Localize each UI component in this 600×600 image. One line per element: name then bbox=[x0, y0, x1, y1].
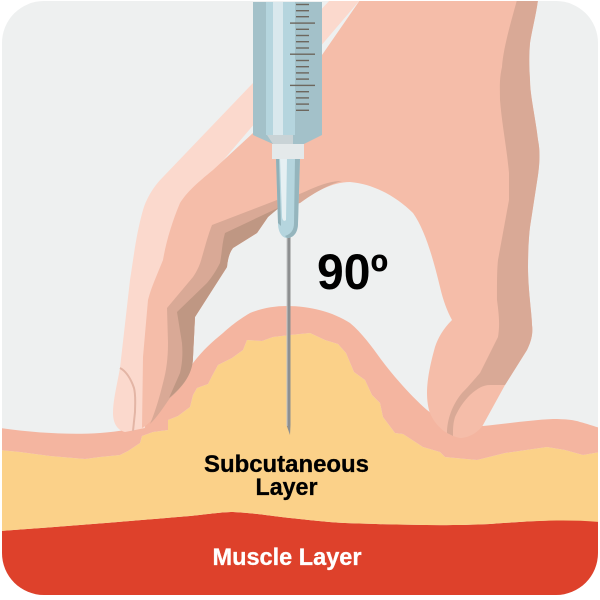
barrel highlight bbox=[273, 2, 283, 135]
hand: deep shadow under palm bbox=[169, 207, 280, 398]
label: 90 degree angle: 90º bbox=[317, 244, 388, 300]
syringe hub bbox=[276, 158, 300, 238]
barrel lighter band bbox=[266, 2, 295, 135]
hand: pinching the skin bbox=[113, 0, 540, 438]
syringe collar bbox=[272, 144, 304, 159]
needle bbox=[286, 236, 290, 435]
hand: thumb shadow bbox=[447, 0, 540, 436]
syringe barrel bbox=[253, 2, 322, 135]
label: subcutaneous layer: Subcutaneous bbox=[204, 451, 369, 478]
panel: subcutaneous fat layer bbox=[0, 333, 600, 531]
syringe bbox=[253, 2, 322, 435]
hub highlight bbox=[280, 158, 287, 221]
label: subcutaneous layer: Layer bbox=[256, 474, 318, 501]
hand: palm and thumb bbox=[142, 0, 540, 438]
hand: left fingernail line bbox=[120, 368, 135, 431]
taper highlight bbox=[267, 135, 293, 144]
hand: light outer edge of index finger bbox=[113, 0, 360, 432]
panel: muscle layer bbox=[0, 512, 600, 600]
hub left shade bbox=[276, 158, 281, 226]
barrel scale marks bbox=[290, 4, 315, 111]
syringe taper bbox=[253, 135, 322, 144]
needle highlight bbox=[286, 238, 288, 426]
hand: shaded under palm bbox=[150, 181, 342, 424]
label: muscle layer: Muscle Layer bbox=[212, 544, 362, 571]
panel: skin layer bbox=[0, 306, 600, 460]
hub right shade bbox=[285, 158, 300, 238]
